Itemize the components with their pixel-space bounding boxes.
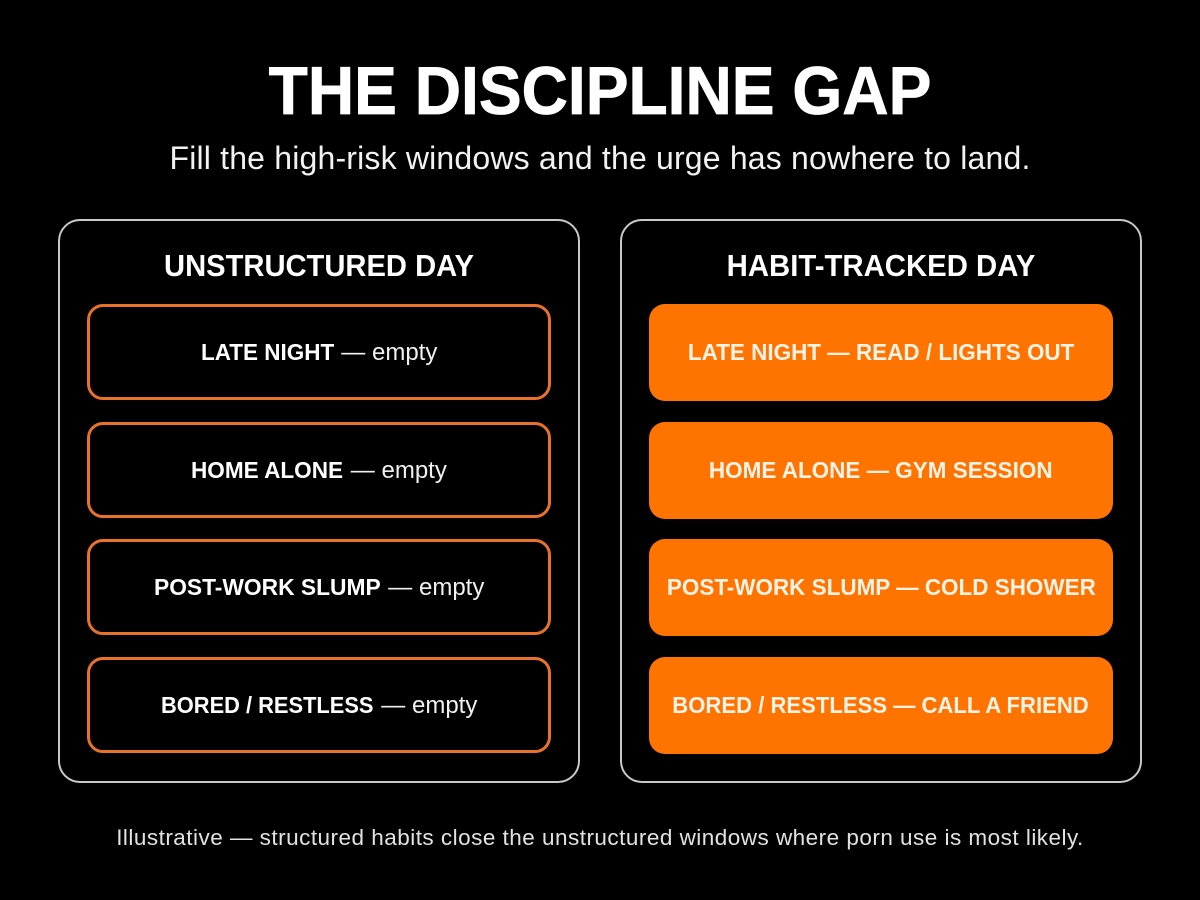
slot: home alone filled: HOME ALONE — GYM SESSION (709, 457, 1053, 483)
slot: post-work slump filled (649, 539, 1113, 636)
title: THE DISCIPLINE GAP (269, 52, 931, 128)
slot: late night filled: LATE NIGHT — READ / LIGHTS OUT (688, 339, 1074, 365)
slot: late night filled (649, 304, 1113, 401)
slot: post-work slump empty: POST-WORK SLUMP (154, 574, 380, 600)
footnote: Illustrative — structured habits close the unstructured windows where porn use is most likely. (116, 825, 1084, 850)
slot: bored restless empty: BORED / RESTLESS (161, 692, 373, 718)
slot: late night empty (87, 304, 551, 400)
slot: late night empty: — empty (341, 339, 437, 366)
slot: home alone empty: — empty (351, 457, 447, 484)
slot: bored restless filled (649, 657, 1113, 754)
subtitle: Fill the high-risk windows and the urge has nowhere to land. (169, 140, 1031, 176)
slot: bored restless empty: — empty (381, 692, 477, 719)
heading: habit-tracked day: HABIT-TRACKED DAY (727, 249, 1035, 283)
panel: unstructured day (58, 219, 580, 783)
slot: home alone filled (649, 422, 1113, 519)
slot: home alone empty: HOME ALONE (191, 457, 343, 483)
slot: bored restless filled: BORED / RESTLESS — CALL A FRIEND (673, 692, 1089, 718)
slot: post-work slump filled: POST-WORK SLUMP — COLD SHOWER (667, 574, 1095, 600)
slot: late night empty: LATE NIGHT (201, 339, 334, 365)
panel: habit-tracked day (620, 219, 1142, 783)
slot: bored restless empty (87, 657, 551, 753)
slot: post-work slump empty (87, 539, 551, 635)
slot: home alone empty (87, 422, 551, 518)
slot: post-work slump empty: — empty (388, 574, 484, 601)
heading: unstructured day: UNSTRUCTURED DAY (164, 249, 474, 283)
